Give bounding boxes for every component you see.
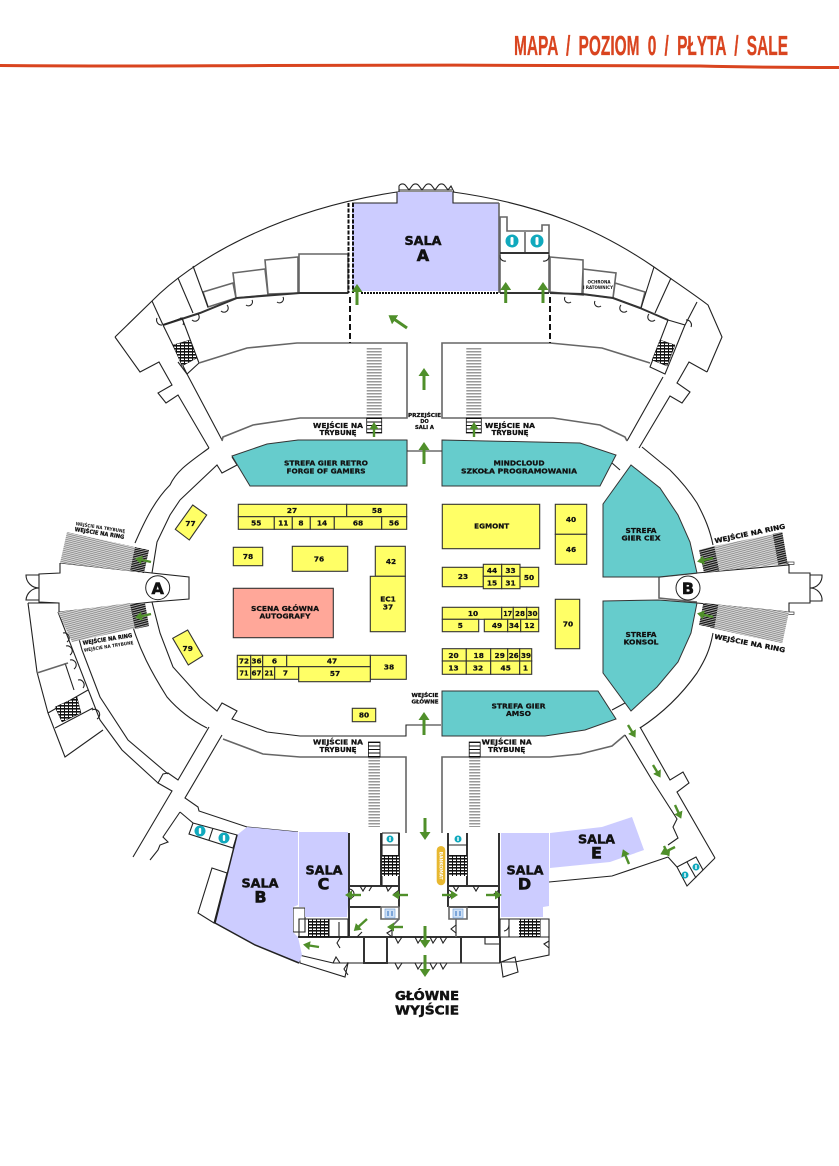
stalls cluster 10 17 28 30 5 49 34 12: 34 (509, 621, 519, 630)
stall egmont (442, 504, 540, 549)
stalls cluster 20 18 29 26 39 13 32 45 1 (442, 649, 532, 674)
stalls: bottom left row: 6 (272, 656, 277, 666)
stalls: bottom left row: 47 (327, 656, 337, 666)
left upper corridor (115, 337, 222, 448)
B lobby (697, 565, 810, 612)
stalls cluster 23 44 33 15 31 50 (442, 564, 539, 589)
label: west upper stair (74, 520, 126, 541)
panel: sala B west wall (215, 835, 299, 963)
label: sala D (506, 864, 544, 894)
stalls 40 and 46: 40 (566, 515, 576, 524)
stalls cluster 10 17 28 30 5 49 34 12: 12 (524, 621, 535, 630)
bankomat: BANKOMAT (438, 852, 443, 880)
label: west lower stair (82, 632, 134, 654)
arrows: direction markers (138, 285, 713, 974)
panel: strefa gier amso: AMSO (506, 710, 531, 718)
stairs: east lower (699, 603, 789, 643)
stalls cluster 20 18 29 26 39 13 32 45 1: 13 (448, 664, 459, 672)
panel: mindcloud: SZKOŁA PROGRAMOWANIA (461, 468, 578, 476)
label: sala A letter: A (417, 246, 430, 265)
stairs: west lower (58, 603, 149, 642)
stall 42: 42 (386, 557, 396, 566)
icon: WC top right 2 (530, 234, 544, 248)
stall 42 (375, 546, 405, 576)
label: west upper stair: WEJŚCIE NA RING (74, 526, 125, 541)
label: west lower stair: WEJŚCIE NA RING (82, 632, 133, 647)
ring walls east (640, 447, 713, 728)
stalls cluster 10 17 28 30 5 49 34 12: 49 (492, 621, 502, 630)
icon: elevator left (385, 909, 395, 918)
stall 76 (292, 546, 348, 571)
stalls: bottom left row (237, 655, 406, 682)
stall 70 (555, 599, 580, 649)
stalls cluster 20 18 29 26 39 13 32 45 1: 45 (501, 664, 511, 672)
icon: elevator right (453, 909, 463, 918)
top decoration (399, 184, 454, 192)
panel: scena główna (233, 588, 333, 638)
stalls: top left row: 11 (278, 519, 288, 528)
stall 79 (173, 630, 203, 665)
label: przejście do sali A: DO (420, 419, 429, 425)
label: sala B (242, 876, 279, 906)
stall 79: 79 (183, 644, 193, 653)
label: wejście na trybunę bottom-right (482, 738, 533, 754)
left stair block (163, 318, 199, 374)
outer roof arc (115, 192, 722, 372)
stalls cluster 23 44 33 15 31 50: 31 (505, 578, 516, 587)
left upper wing rooms (203, 254, 348, 307)
label: west lower stair: WEJŚCIE NA TRYBUNĘ (83, 639, 134, 654)
icon: WC lower-left 1 (194, 826, 206, 836)
stalls 40 and 46 (555, 504, 587, 564)
stalls: top left row: 8 (298, 519, 304, 528)
label: wejście główne: WEJŚCIE (412, 692, 439, 699)
stalls: bottom left row: 67 (252, 668, 262, 678)
panel: strefa gier cex: GIER CEX (622, 534, 661, 542)
stall 80 (352, 708, 376, 722)
stalls cluster 20 18 29 26 39 13 32 45 1: 18 (474, 651, 484, 660)
stalls cluster 23 44 33 15 31 50: 15 (487, 578, 497, 587)
panel: scena główna: AUTOGRAFY (260, 612, 311, 620)
stall EC1 37: 37 (383, 602, 393, 611)
label: przejście do sali A: PRZEJŚCIE (408, 412, 442, 419)
stalls: bottom left row: 71 (240, 668, 248, 678)
stalls cluster 23 44 33 15 31 50: 50 (524, 573, 534, 582)
label: wejście na trybunę bottom-left (313, 738, 364, 754)
stalls: bottom left row: 72 (239, 656, 249, 666)
label: przejście do sali A: SALI A (415, 425, 434, 431)
label: wejście na trybunę bottom-left: WEJŚCIE NA (313, 738, 364, 747)
left rectangle beside sala B (198, 868, 227, 923)
label: przejście do sali A (408, 412, 442, 431)
second ring top-right (442, 343, 650, 441)
panel: strefa gier retro: FORGE OF GAMERS (286, 468, 366, 476)
stalls: top left row: 27 (287, 506, 297, 515)
label: wejście na trybunę top-right: TRYBUNĘ (492, 429, 529, 437)
stairs: bottom right (469, 742, 480, 827)
top wing doors (157, 297, 691, 327)
ring walls west (133, 448, 209, 728)
panel: sala C (299, 832, 348, 917)
stall EC1 37: EC1 (380, 595, 396, 604)
label: sala B: SALA (242, 876, 279, 890)
lower-left corridor (133, 727, 298, 860)
panel: strefa gier retro (232, 440, 407, 486)
panel: strefa konsol (603, 600, 697, 711)
lower second ring (223, 735, 625, 833)
stalls cluster 20 18 29 26 39 13 32 45 1: 20 (448, 651, 459, 660)
stairs: west upper (60, 532, 149, 573)
panel: strefa gier retro: STREFA GIER RETRO (284, 460, 368, 468)
label: główne wyjście: GŁÓWNE (395, 988, 459, 1003)
stalls cluster 23 44 33 15 31 50: 33 (505, 566, 516, 575)
stairs: bottom left (368, 742, 380, 827)
lower-right toilets box (668, 857, 715, 886)
stall 78: 78 (243, 552, 253, 561)
icon: WC lower block left (386, 836, 394, 842)
label: sala C: SALA (306, 864, 343, 878)
stalls cluster 10 17 28 30 5 49 34 12: 28 (515, 609, 525, 618)
panel: strefa gier amso: STREFA GIER (492, 702, 546, 710)
panel: strefa konsol: KONSOL (624, 638, 659, 646)
stalls: top left row: 14 (317, 519, 327, 528)
stalls cluster 20 18 29 26 39 13 32 45 1: 29 (495, 651, 505, 660)
label: wejście na trybunę bottom-right: WEJŚCIE NA (482, 738, 533, 747)
sala E lower wall (549, 857, 668, 882)
label: east upper stair: WEJŚCIE NA RING (714, 521, 786, 545)
right upper corridor (627, 362, 707, 448)
stalls: bottom left row: 57 (330, 669, 340, 678)
label: wejście na trybunę bottom-right: TRYBUNĘ (488, 746, 526, 754)
stalls: top left row (238, 504, 407, 529)
label: sala E: SALA (578, 832, 616, 846)
label: wejście na trybunę top-left: WEJŚCIE NA (313, 421, 364, 430)
marker A: A (152, 579, 165, 598)
west wing doors (63, 633, 100, 719)
stalls: top left row: 56 (389, 519, 399, 528)
label: east lower stair: WEJŚCIE NA RING (714, 632, 786, 654)
right upper wing rooms (550, 257, 645, 308)
stairs: top left (367, 348, 382, 433)
WC box lower-left (189, 823, 237, 848)
marker A (146, 576, 170, 600)
stalls: top left row: 55 (251, 519, 261, 528)
stalls 40 and 46: 46 (566, 545, 576, 554)
label: wejście na trybunę top-right: WEJŚCIE NA (485, 421, 536, 430)
icon: WC east 2 (692, 864, 700, 870)
bankomat (437, 846, 445, 885)
stairs: lower block (308, 855, 540, 937)
stalls: bottom left row: 21 (264, 668, 274, 678)
label: sala E (578, 832, 616, 862)
panel: strefa konsol: STREFA (626, 631, 657, 639)
stall 70: 70 (563, 620, 573, 628)
stalls: bottom left row: 36 (252, 656, 262, 666)
stairs: east upper (699, 532, 788, 573)
stalls cluster 10 17 28 30 5 49 34 12 (442, 607, 539, 632)
panel: scena główna: SCENA GŁÓWNA (251, 604, 320, 613)
right stair block (650, 320, 685, 374)
stalls: bottom left row: 7 (283, 668, 288, 678)
icon: WC east 1 (682, 872, 688, 878)
stalls cluster 23 44 33 15 31 50: 44 (487, 566, 497, 575)
stall 80: 80 (359, 710, 369, 720)
label: sala E: E (591, 844, 602, 862)
A lobby (39, 563, 152, 612)
stalls cluster 10 17 28 30 5 49 34 12: 10 (468, 609, 478, 618)
label: sala A: SALA (404, 234, 442, 248)
icon: WC lower-left 2 (218, 832, 230, 844)
panel: strefa gier cex (603, 465, 697, 577)
B lobby doors (810, 575, 822, 601)
marker B: B (682, 579, 694, 598)
stalls cluster 20 18 29 26 39 13 32 45 1: 32 (473, 664, 483, 672)
label: wejście główne (412, 692, 439, 705)
stall 76: 76 (314, 554, 324, 563)
label: sala D: D (518, 874, 531, 894)
title underline (0, 65, 839, 68)
stalls cluster 10 17 28 30 5 49 34 12: 30 (528, 609, 538, 618)
panel: sala E (550, 817, 644, 868)
panel: mindcloud (442, 440, 616, 486)
label: ochrona i ratownicy (583, 280, 613, 290)
lower block walls left (349, 833, 399, 937)
lower block walls right (448, 833, 499, 937)
panel: sala B (215, 827, 302, 963)
icon: WC top right 1 (506, 234, 518, 248)
stalls: top left row: 68 (353, 519, 363, 528)
label: wejście na trybunę top-right (485, 421, 536, 437)
panel: sala D (501, 833, 549, 917)
label: wejście na trybunę top-left: TRYBUNĘ (320, 429, 357, 437)
stalls: top left row: 58 (372, 506, 382, 515)
stairs: top right (466, 348, 481, 433)
lower-right corridor (625, 727, 715, 858)
second ring top-left (199, 343, 407, 441)
label: ochrona i ratownicy: I RATOWNICY (583, 285, 613, 290)
label: sala B: B (254, 888, 267, 906)
label: west upper stair: WEJŚCIE NA TRYBUNĘ (75, 520, 126, 535)
A lobby doors (26, 575, 39, 600)
label: ochrona i ratownicy: OCHRONA (588, 280, 611, 284)
stalls cluster 10 17 28 30 5 49 34 12: 5 (458, 621, 463, 630)
stalls cluster 23 44 33 15 31 50: 23 (458, 572, 468, 581)
label: sala C: C (318, 874, 329, 894)
label: wejście na trybunę bottom-left: TRYBUNĘ (320, 746, 357, 754)
marker B (676, 576, 700, 600)
stalls cluster 20 18 29 26 39 13 32 45 1: 39 (521, 651, 531, 660)
stall 77: 77 (185, 519, 196, 528)
stall egmont: EGMONT (474, 523, 509, 531)
label: sala D: SALA (506, 864, 544, 878)
panel: strefa gier amso (442, 691, 616, 736)
building doors (333, 886, 549, 975)
arena wall west (152, 457, 441, 736)
west wing (58, 612, 168, 783)
stall 77 (175, 505, 207, 540)
label: sala C (306, 864, 343, 894)
label: wejście główne: GŁÓWNE (412, 698, 439, 705)
stalls cluster 20 18 29 26 39 13 32 45 1: 26 (509, 651, 519, 660)
label: główne wyjście: WYJŚCIE (395, 1002, 459, 1018)
stall 78 (233, 547, 263, 566)
icon: WC lower block right (454, 836, 462, 842)
WC block top right (500, 217, 549, 293)
stalls cluster 10 17 28 30 5 49 34 12: 17 (503, 609, 512, 618)
panel: mindcloud: MINDCLOUD (494, 460, 545, 468)
floor plan walls (26, 184, 822, 977)
stall EC1 37 (370, 576, 405, 632)
label: główne wyjście (395, 988, 459, 1018)
stalls: bottom left row: 38 (384, 662, 394, 672)
stalls cluster 20 18 29 26 39 13 32 45 1: 1 (523, 664, 528, 672)
panel: sala A (348, 192, 550, 343)
panel: strefa gier cex: STREFA (626, 527, 657, 535)
label: wejście na trybunę top-left (313, 421, 364, 437)
